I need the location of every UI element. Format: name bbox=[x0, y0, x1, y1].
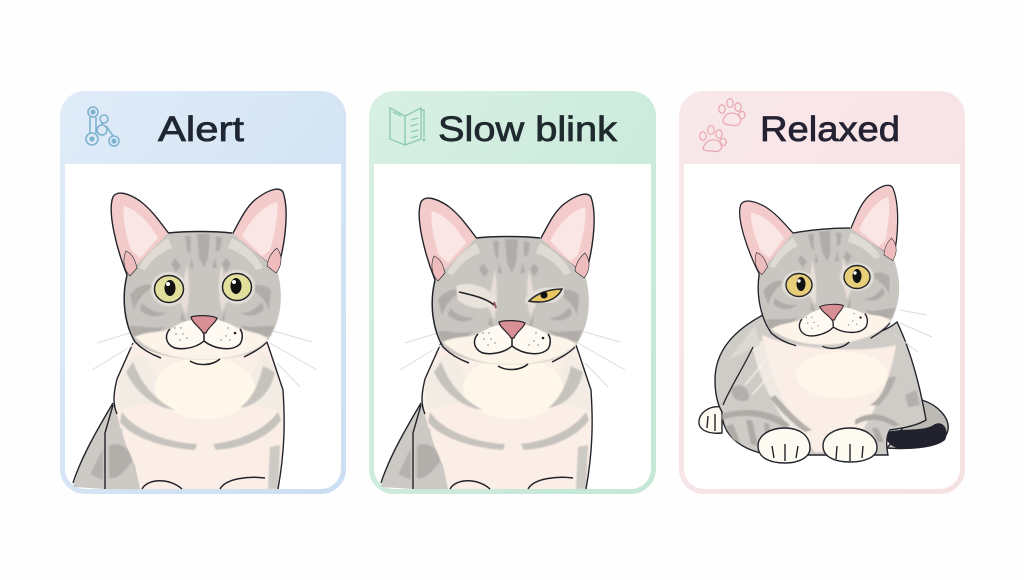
panel: relaxed bbox=[679, 91, 965, 494]
heading: Relaxed: Relaxed bbox=[760, 110, 900, 149]
heading: Slow blink: Slow blink bbox=[438, 110, 618, 149]
cat: lying down bbox=[699, 185, 948, 463]
alert content area bbox=[65, 164, 341, 489]
panel: alert bbox=[60, 91, 346, 494]
panel: slow blink bbox=[369, 91, 656, 494]
alert eyes bbox=[151, 270, 255, 306]
heading: Alert: Alert bbox=[158, 110, 244, 149]
icon: network nodes bbox=[86, 107, 119, 146]
icon: open book bbox=[390, 108, 425, 145]
relaxed card frame bbox=[679, 91, 965, 494]
relaxed whiskers bbox=[893, 310, 932, 352]
lying body bbox=[715, 315, 926, 455]
alert card frame bbox=[60, 91, 346, 494]
slow blink content area bbox=[374, 164, 651, 489]
small back paw bbox=[699, 407, 722, 433]
relaxed content area bbox=[684, 164, 960, 489]
slow blink card frame bbox=[369, 91, 656, 494]
cat: alert sitting bbox=[73, 189, 317, 489]
relaxed eyes bbox=[782, 263, 874, 299]
icon: paw prints bbox=[700, 99, 745, 152]
cat: winking bbox=[381, 194, 625, 489]
winking eyes bbox=[456, 284, 562, 308]
tail bbox=[886, 400, 948, 449]
front paws bbox=[707, 414, 877, 463]
